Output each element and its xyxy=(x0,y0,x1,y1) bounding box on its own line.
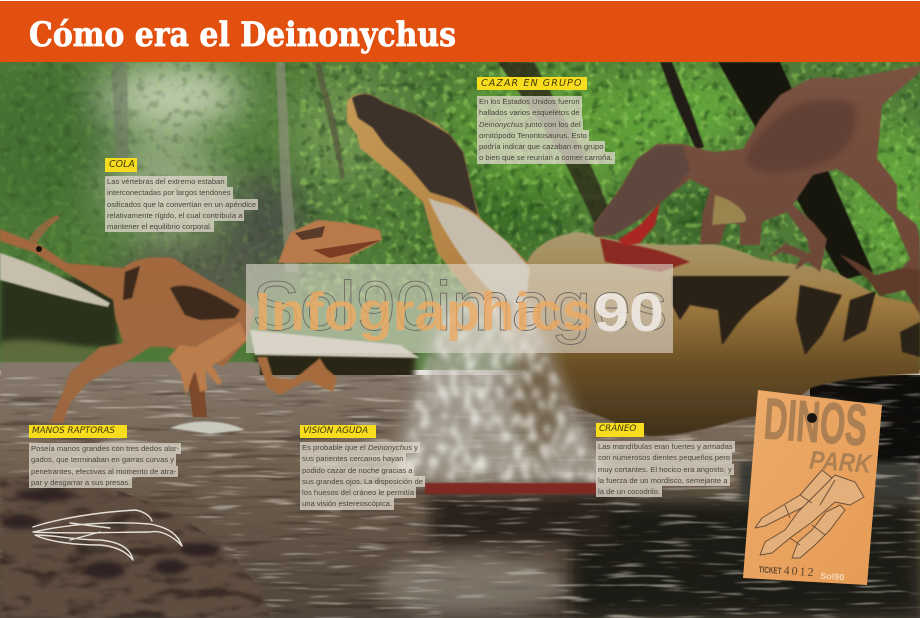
watermark panel xyxy=(246,264,673,353)
text block: craneo: con numerosos dientes pequeños pero xyxy=(598,453,730,462)
raptor shade patches xyxy=(745,100,856,173)
text block: cazar en grupo xyxy=(477,77,615,164)
text block: cazar en grupo: podría indicar que cazaban en grupo xyxy=(479,142,603,151)
rocky shore xyxy=(0,470,280,618)
text block: vision aguda: podido cazar de noche gracias a xyxy=(302,466,412,474)
watermark outlined text: Sol90images xyxy=(252,267,667,345)
text block: cazar en grupo: Deinonychus junto con los del xyxy=(479,120,581,128)
prey blood xyxy=(600,238,690,272)
ticket serial: 4012 xyxy=(783,563,816,579)
ticket sub wordmark: PARK xyxy=(808,445,874,479)
prey stripes xyxy=(672,276,920,357)
dinosaur: left raptor xyxy=(0,220,382,423)
text block: cazar en grupo: o bien que se reunían a comer carroña. xyxy=(479,153,613,162)
text block: cazar en grupo: ornitópodo Tenontosaurus. Esto xyxy=(479,131,587,140)
forest background xyxy=(0,60,920,370)
text block: vision aguda xyxy=(300,425,425,510)
ticket hole xyxy=(807,413,817,423)
title: Cómo era el Deinonychus xyxy=(29,15,456,55)
water splash xyxy=(170,295,620,494)
text block: craneo: la de un cocodrilo. xyxy=(598,487,660,496)
near hand xyxy=(168,322,247,395)
text block: manos raptoras: par y desgarrar a sus presas. xyxy=(31,478,130,487)
foot xyxy=(840,255,920,315)
dinosaur: large prey xyxy=(347,94,920,436)
prey body xyxy=(480,232,920,436)
ticket xyxy=(743,386,882,585)
head xyxy=(278,220,382,263)
text block: vision aguda: sus grandes ojos. La disposición de xyxy=(302,477,423,486)
text block: craneo: CRÁNEO xyxy=(599,424,636,434)
text block: cazar en grupo: hallados varios esqueletos de xyxy=(479,108,580,117)
text block: craneo: muy cortantes. El hocico era angosto, y xyxy=(598,464,732,474)
publisher mark: Sol90 xyxy=(820,571,845,582)
text block: craneo xyxy=(596,423,735,497)
river xyxy=(0,362,920,618)
header band xyxy=(0,1,920,62)
text block: manos raptoras: gados, que terminaban en garras curvas y xyxy=(31,455,174,464)
text block: manos raptoras xyxy=(29,425,181,488)
prey neck xyxy=(347,94,530,345)
watermark number: 90 xyxy=(594,283,664,343)
text block: cazar en grupo: En los Estados Unidos fueron xyxy=(479,97,580,106)
raptor tongue xyxy=(618,203,660,246)
mouth xyxy=(313,240,381,258)
tail band xyxy=(36,246,42,252)
text block: vision aguda: sus parientes cercanos hayan xyxy=(302,454,404,463)
raptor belly xyxy=(712,195,746,225)
text block: cola xyxy=(105,158,258,232)
ticket number: TICKET xyxy=(758,564,782,576)
body and tail xyxy=(0,229,255,423)
text block: manos raptoras: Poseía manos grandes con tres dedos alar- xyxy=(31,444,179,453)
text block: cola: Las vértebras del extremo estaban xyxy=(107,177,225,186)
text block: vision aguda: los huesos del cráneo le permitía xyxy=(302,488,414,497)
far leg xyxy=(187,373,207,417)
watermark orange text: Infographics xyxy=(255,282,593,342)
prey throat xyxy=(428,198,530,310)
dinosaur: right raptor xyxy=(593,65,920,315)
far arm xyxy=(257,357,337,395)
text block: vision aguda: Es probable que el Deinonychus y xyxy=(302,443,418,452)
text block: cola: relativamente rígido, el cual contribuía a xyxy=(107,211,242,220)
text block: vision aguda: VISIÓN AGUDA xyxy=(303,426,368,436)
text block: cola: osificados que la convertían en un apéndice xyxy=(107,200,256,208)
left background: dark woods, log and bank xyxy=(0,215,420,382)
dark patches xyxy=(123,266,240,320)
text block: cola: mantener el equilibrio corporal. xyxy=(107,222,212,231)
text block: manos raptoras: MANOS RAPTORAS xyxy=(32,426,115,436)
text block: craneo: la fuerza de un mordisco, semejante a xyxy=(598,476,728,485)
text block: craneo: Las mandíbulas eran fuertes y armadas xyxy=(598,442,733,451)
text block: cola: interconectadas por largos tendones xyxy=(107,188,231,197)
text block: cazar en grupo: CAZAR EN GRUPO xyxy=(481,78,582,89)
icon: claw drawing on ticket xyxy=(755,470,864,558)
eye patch xyxy=(295,226,325,240)
text block: manos raptoras: penetrantes, efectivas al momento de atra- xyxy=(31,466,176,476)
text block: vision aguda: una visión estereoscópica. xyxy=(302,499,392,508)
raptor head xyxy=(594,146,690,236)
icon: white claw outline xyxy=(33,510,182,560)
text block: cola: COLA xyxy=(109,159,135,170)
prey head dark crest xyxy=(352,94,478,215)
